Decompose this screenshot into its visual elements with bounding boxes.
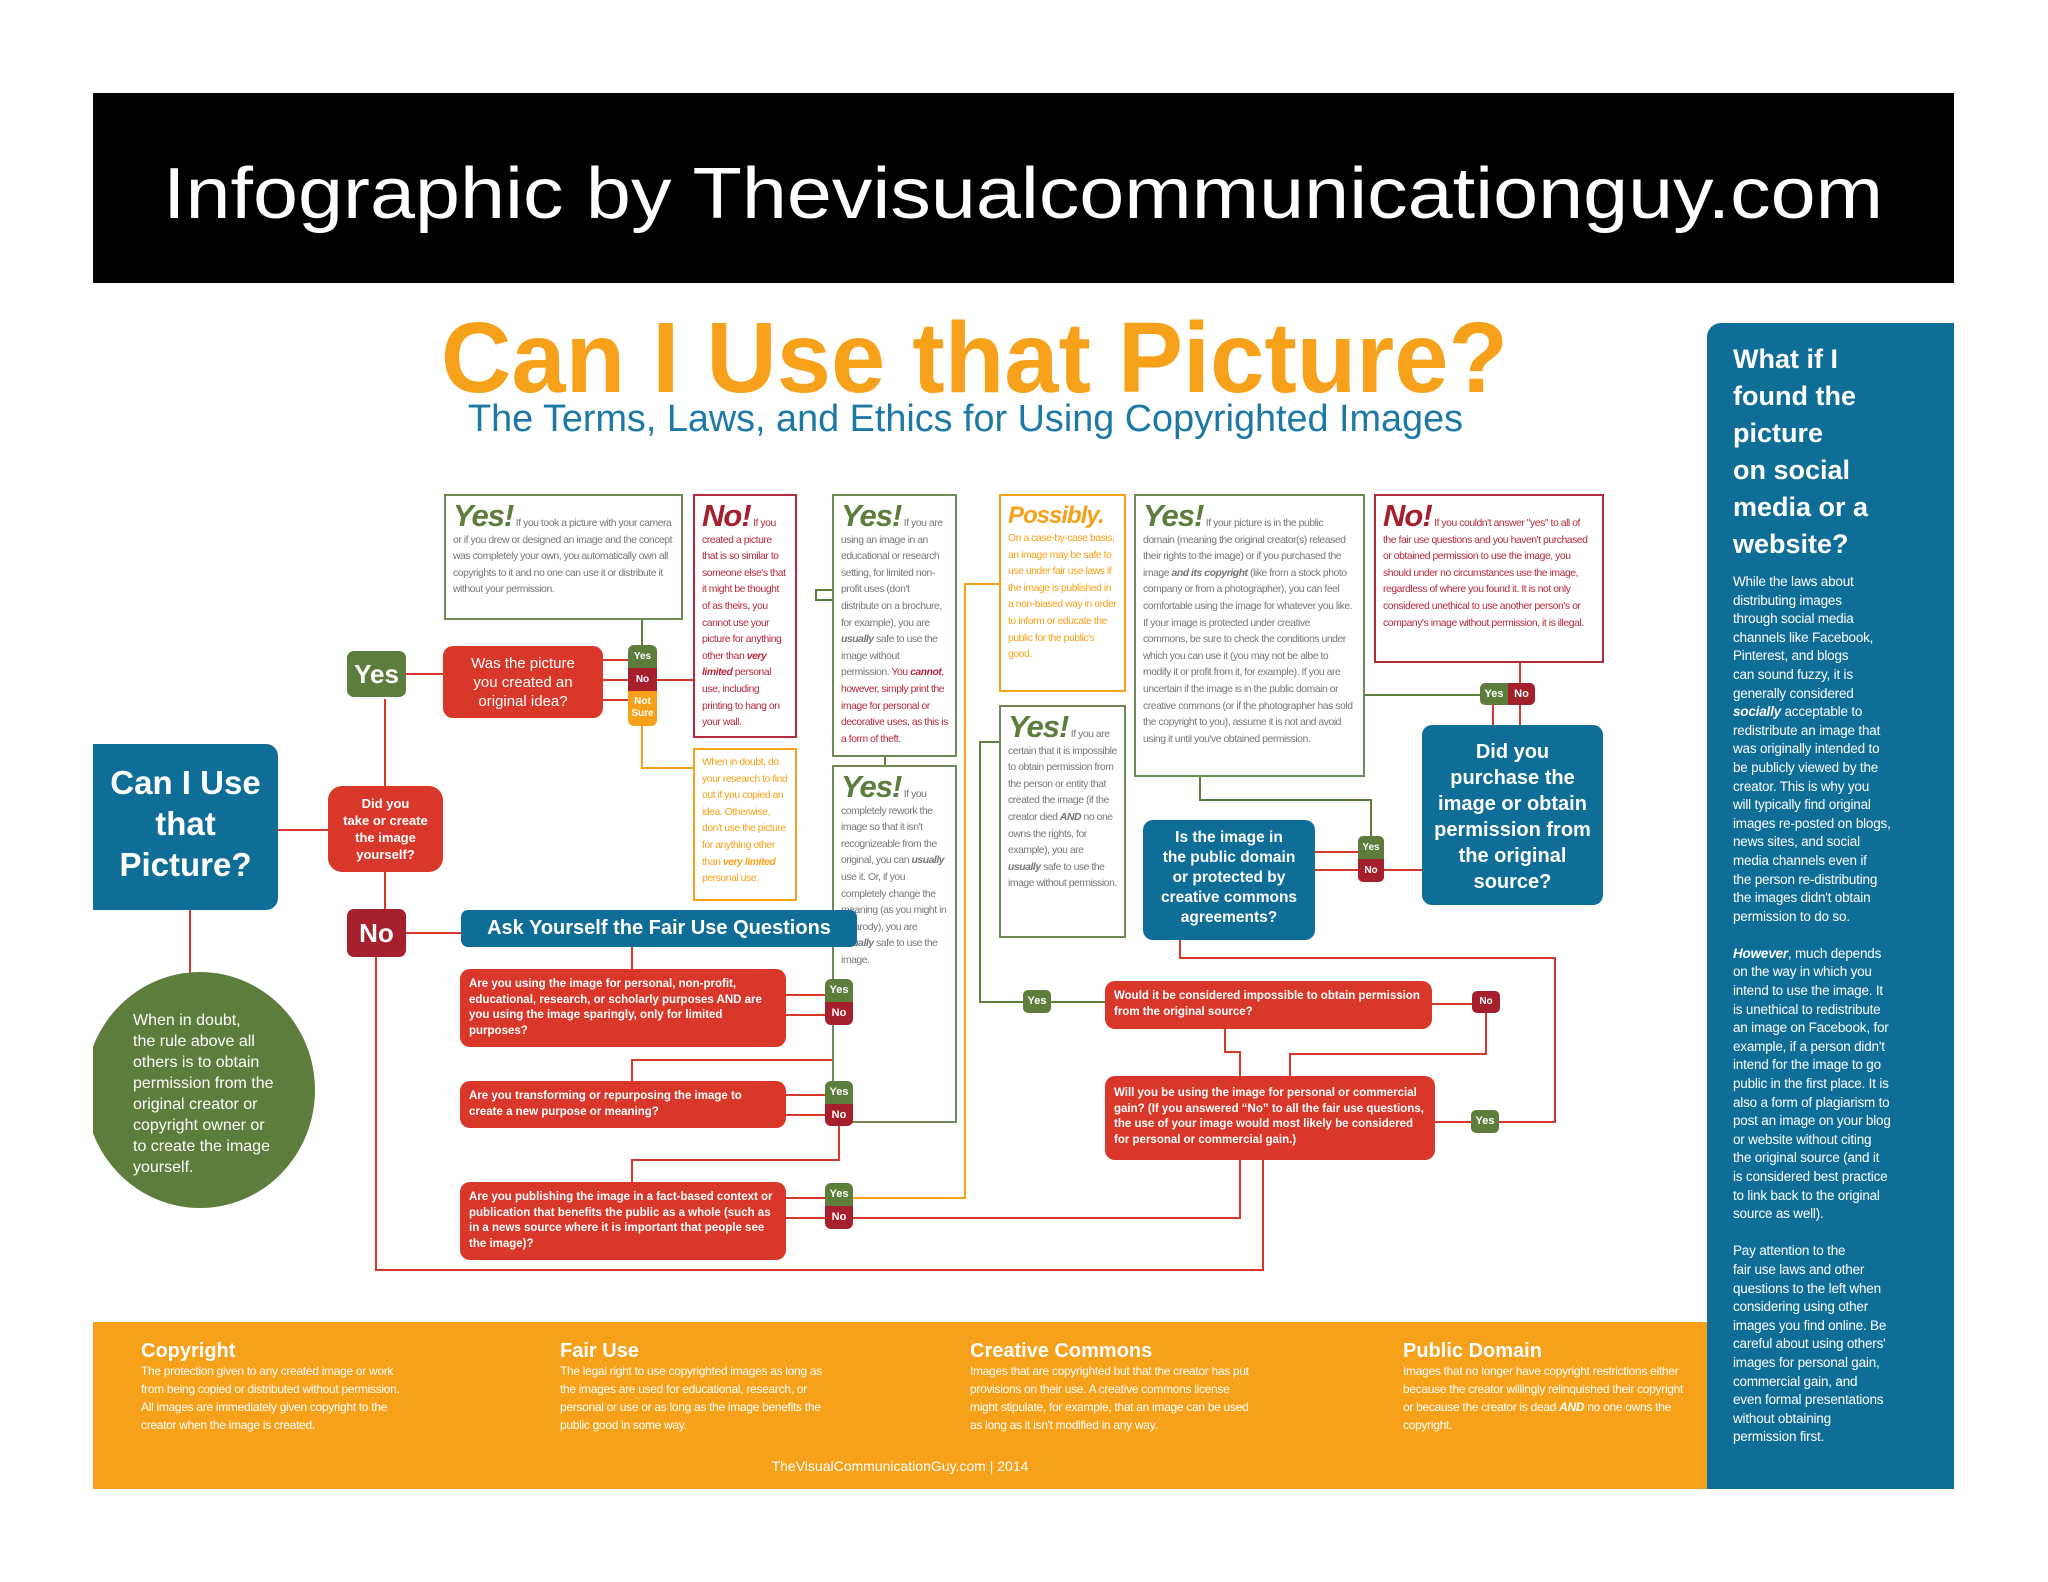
right body: creator. This is why you [1733, 779, 1869, 794]
right body: images re-posted on blogs, [1733, 816, 1891, 831]
will you be using [1105, 1076, 1435, 1160]
is the image public domain: creative commons [1161, 889, 1297, 906]
yes/no chip purchase: No [1514, 688, 1529, 700]
would it be impossible: Would it be considered impossible to obtain permission from the original source? [1114, 990, 1420, 1018]
Q1: Are you using the image for personal, non-profit, educational, research, or scholarly purposes AND are you using the image sparingly, only for limited purposes? [469, 978, 762, 1036]
right body: is considered best practice [1733, 1169, 1887, 1184]
creative commons: Creative Commons [970, 1340, 1152, 1362]
right body: intend to use the image. It [1733, 983, 1883, 998]
yes chip commercial: Yes [1476, 1115, 1494, 1127]
right heading: What if I [1733, 344, 1838, 374]
right body: distributing images [1733, 593, 1842, 608]
right body: was originally intended to [1733, 741, 1879, 756]
yes/no/notsure column: Sure [631, 708, 654, 719]
green circle rule: permission from the [133, 1075, 274, 1092]
right body: generally considered [1733, 686, 1854, 701]
when in doubt box: When in doubt, do your research to find out if you copied an idea. Otherwise, don't use the picture for anything other than very limited personal use. [702, 757, 787, 884]
ask yourself banner: Ask Yourself the Fair Use Questions [487, 917, 831, 939]
yes/no/notsure column: No [636, 674, 649, 685]
did you purchase: permission from [1434, 819, 1591, 841]
no chip big: No [359, 918, 394, 948]
is the image public domain: Is the image in [1175, 829, 1283, 846]
copyright: The protection given to any created image or work from being copied or distributed without permission. All images are immediately given copyright to the creator when the image is created. [141, 1364, 400, 1432]
Q2 [460, 1081, 786, 1128]
Q3 chips: Yes [830, 1188, 848, 1200]
left box: Can I Use that Picture: that [155, 805, 216, 842]
no chip impossible: No [1479, 996, 1493, 1007]
yes chip commercial [1471, 1110, 1499, 1133]
did you take: take or create [343, 813, 428, 828]
right body: be publicly viewed by the [1733, 760, 1878, 775]
right body: Pay attention to the [1733, 1243, 1845, 1258]
Q3 chips: No [832, 1211, 846, 1223]
fair use: Fair Use [560, 1340, 639, 1362]
right body: considering using other [1733, 1299, 1868, 1314]
did you purchase: the original [1459, 845, 1566, 867]
yes/no/notsure column [628, 645, 657, 726]
was picture original: Was the picture [471, 655, 575, 672]
right body: Pinterest, and blogs [1733, 648, 1848, 663]
yes/no/notsure column: Not [634, 696, 651, 707]
did you purchase: Did you [1476, 741, 1549, 763]
right body: an image on Facebook, for [1733, 1020, 1889, 1035]
right body: to link back to the original [1733, 1188, 1880, 1203]
no box: couldn't answer: No! If you couldn't answer "yes" to all of the fair use questions and you haven't purchased or obtained permission to use the image, you should under no circumstances use the image, regardless of where you found it. It is not only considered unethical to use another person's or company's image without permission, it is illegal. [1383, 498, 1588, 629]
title: The Terms, Laws, and Ethics for Using Copyrighted Images [468, 398, 1463, 440]
possibly box [999, 494, 1126, 692]
was picture original: you created an [473, 674, 573, 691]
green circle rule: copyright owner or [133, 1117, 265, 1134]
yes box: own picture: Yes! If you took a picture with your camera or if you drew or designed an image and the concept was completely your own, you automatically own all copyrights to it and no one can use it or distribute it without your permission. [453, 498, 672, 595]
Q1 chips: No [832, 1007, 846, 1019]
banner [93, 93, 1954, 283]
was picture original [443, 646, 603, 718]
right body [1733, 574, 1891, 1444]
public domain: Public Domain [1403, 1340, 1542, 1362]
did you take [328, 786, 443, 872]
will you be using: Will you be using the image for personal or commercial gain? (If you answered “No” to all the fair use questions, the use of your image would most likely be considered for personal or commercial gain.) [1114, 1087, 1424, 1146]
public domain: Images that no longer have copyright restrictions either because the creator willingly relinquished their copyright or because the creator is dead AND no one owns the copyright. [1403, 1364, 1683, 1432]
Q1 chips: Yes [830, 984, 848, 996]
right body: channels like Facebook, [1733, 630, 1873, 645]
Q2 chips [825, 1081, 853, 1126]
yes/no chip purchase [1480, 683, 1535, 705]
is the image public domain [1143, 820, 1315, 940]
no chip big [347, 909, 406, 957]
Q2 chips: Yes [830, 1086, 848, 1098]
right body: images you find online. Be [1733, 1318, 1886, 1333]
yes box: rework [832, 765, 957, 1123]
Q3 [460, 1182, 786, 1260]
no box: similar: No! If you created a picture that is so similar to someone else's that it might be thought of as theirs, you cannot use your picture for anything other than very limited personal use, including printing to hang on your wall. [702, 498, 786, 728]
right body: is unethical to redistribute [1733, 1002, 1880, 1017]
yes/no chip purchase: Yes [1485, 688, 1503, 700]
right body: can sound fuzzy, it is [1733, 667, 1853, 682]
right heading: on social [1733, 455, 1850, 485]
did you take: yourself? [356, 847, 415, 862]
Q2 chips: No [832, 1108, 846, 1120]
right panel [1707, 323, 1954, 1489]
right body: or website without citing [1733, 1132, 1871, 1147]
footer definitions [93, 1322, 1707, 1489]
yes chip big: Yes [354, 659, 399, 689]
right body: socially acceptable to [1733, 704, 1862, 719]
yes box: impossible [999, 705, 1126, 938]
yes box: impossible: Yes! If you are certain that it is impossible to obtain permission from the person or entity that created the image (if the creator died AND no one owns the rights, for example), you are usually safe to use the image without permission. [1008, 709, 1117, 889]
when in doubt box [693, 748, 797, 901]
yes/no chip PD: Yes [1362, 842, 1380, 853]
right heading: media or a [1733, 492, 1868, 522]
yes chip impossible: Yes [1028, 995, 1046, 1007]
right body: also a form of plagiarism to [1733, 1095, 1889, 1110]
right heading: found the [1733, 381, 1856, 411]
right body: through social media [1733, 611, 1854, 626]
yes chip impossible [1023, 990, 1051, 1013]
left box: Can I Use that Picture: Can I Use [110, 764, 261, 801]
Q3 chips [825, 1183, 853, 1229]
right body: even formal presentations [1733, 1392, 1883, 1407]
Q1 [460, 969, 786, 1047]
copyright: Copyright [141, 1340, 235, 1362]
yes box: public domain: Yes! If your picture is in the public domain (meaning the original creator(s) released their rights to the image) or if you purchased the image and its copyright (like from a stock photo company or from a photographer), you can feel comfortable using the image for whatever you like. If your image is protected under creative commons, be sure to check the conditions under which you can use it (you may not be albe to modify it or profit from it, for example). If you are uncertain if the image is in the public domain or creative commons (or if the photographer has sold the copyright to you), assume it is not and avoid using it until you've obtained permission. [1143, 498, 1353, 745]
right body: questions to the left when [1733, 1281, 1881, 1296]
green circle rule: others is to obtain [133, 1054, 259, 1071]
right body: without obtaining [1733, 1411, 1831, 1426]
right body: permission to do so. [1733, 909, 1850, 924]
green circle rule [93, 972, 315, 1208]
green circle rule: original creator or [133, 1096, 258, 1113]
green circle rule: to create the image [133, 1138, 270, 1155]
possibly box: Possibly. [1008, 502, 1103, 529]
right body: post an image on your blog [1733, 1113, 1891, 1128]
yes box: rework: Yes! If you completely rework the image so that it isn't recognizeable from the original, you can usually use it. Or, if you completely change the meaning (as you might in a parody), you are usually safe to use the image. [841, 769, 946, 966]
did you purchase: image or obtain [1438, 793, 1587, 815]
fair use: The legal right to use copyrighted images as long as the images are used for educational, research, or personal or use or as long as the image benefits the public good in some way. [560, 1364, 822, 1432]
right body: commercial gain, and [1733, 1374, 1857, 1389]
right body: intend for the image to go [1733, 1057, 1881, 1072]
is the image public domain: or protected by [1173, 869, 1285, 886]
green circle rule: When in doubt, [133, 1012, 241, 1029]
would it be impossible [1105, 981, 1432, 1029]
right body: the original source (and it [1733, 1150, 1879, 1165]
right body: fair use laws and other [1733, 1262, 1864, 1277]
yes box: educational: Yes! If you are using an image in an educational or research setting, for limited non-profit uses (don't distribute on a brochure, for example), you are usually safe to use the image without permission. You cannot, however, simply print the image for personal or decorative uses, as this is a form of theft. [841, 498, 948, 745]
Q2: Are you transforming or repurposing the image to create a new purpose or meaning? [469, 1090, 742, 1118]
right body: permission first. [1733, 1429, 1824, 1444]
right heading: website? [1733, 529, 1849, 559]
right body: news sites, and social [1733, 834, 1860, 849]
did you purchase: source? [1474, 871, 1551, 893]
Q3: Are you publishing the image in a fact-based context or publication that benefits the public as a whole (such as in a news source where it is important that people see the image)? [469, 1191, 773, 1250]
yes chip big [347, 651, 406, 697]
creative commons: Images that are copyrighted but that the creator has put provisions on their use. A creative commons license might stipulate, for example, that an image can be used as long as it isn't modified in any way. [970, 1364, 1249, 1432]
right body: public in the first place. It is [1733, 1076, 1889, 1091]
banner: Infographic by Thevisualcommunicationguy.com [163, 154, 1883, 234]
right body: on the way in which you [1733, 964, 1872, 979]
did you take: Did you [362, 796, 409, 811]
right body: source as well). [1733, 1206, 1824, 1221]
no box: couldn't answer [1374, 494, 1604, 663]
did you take: the image [355, 830, 416, 845]
did you purchase [1422, 725, 1603, 905]
right body: will typically find original [1733, 797, 1871, 812]
right body: careful about using others' [1733, 1336, 1886, 1351]
was picture original: original idea? [478, 693, 568, 710]
did you purchase: purchase the [1450, 767, 1575, 789]
yes/no chip PD [1358, 836, 1384, 882]
yes/no/notsure column: Yes [634, 651, 651, 662]
right body: While the laws about [1733, 574, 1854, 589]
left box: Can I Use that Picture: Picture? [119, 846, 252, 883]
Q1 chips [825, 979, 853, 1025]
right heading [1732, 344, 1868, 559]
yes/no chip PD: No [1364, 865, 1378, 876]
right body: the person re-distributing [1733, 872, 1877, 886]
green circle rule: yourself. [133, 1159, 193, 1176]
right body: media channels even if [1733, 853, 1867, 868]
is the image public domain: the public domain [1163, 849, 1295, 866]
right body: images for personal gain, [1733, 1355, 1880, 1370]
right body: However, much depends [1733, 946, 1881, 961]
green circle rule: the rule above all [133, 1033, 255, 1050]
no chip impossible [1472, 991, 1500, 1013]
right heading: picture [1733, 418, 1823, 448]
footer credit: TheVisualCommunicationGuy.com | 2014 [772, 1458, 1028, 1474]
ask yourself banner [461, 910, 857, 947]
right body: the images didn't obtain [1733, 890, 1870, 905]
is the image public domain: agreements? [1181, 909, 1277, 926]
right body: example, if a person didn't [1733, 1039, 1885, 1054]
possibly box: On a case-by-case basis, an image may be safe to use under fair use laws if the image is published in a non-biased way in order to inform or educate the public for the public's good. [1008, 533, 1116, 660]
right body: redistribute an image that [1733, 723, 1880, 738]
left box: Can I Use that Picture [93, 744, 278, 910]
